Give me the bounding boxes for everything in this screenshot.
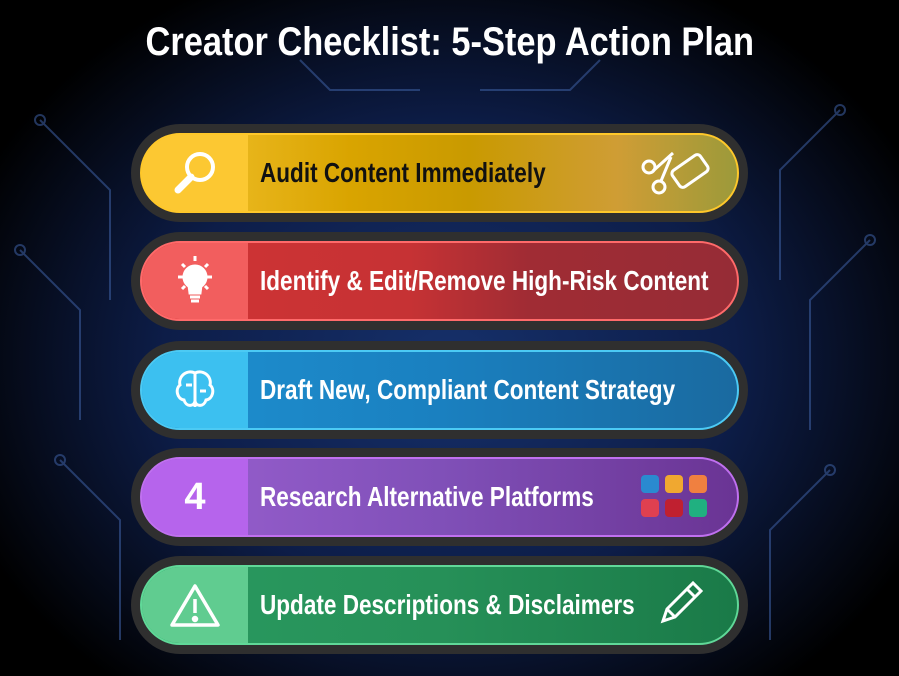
number 4: 4 <box>184 476 206 518</box>
step 4 <box>131 448 748 546</box>
step 5 <box>131 556 748 654</box>
step 3 <box>131 341 748 439</box>
text: Update Descriptions & Disclaimers <box>260 589 635 620</box>
icon: app grid <box>641 475 707 517</box>
icon: scissors eraser <box>642 152 710 194</box>
step 1 <box>131 124 748 222</box>
text: Audit Content Immediately <box>260 157 546 188</box>
icon: brain <box>142 352 248 428</box>
icon: magnifier <box>142 135 248 211</box>
text: Research Alternative Platforms <box>260 481 594 512</box>
number 4 <box>142 459 248 535</box>
icon: warning <box>142 567 248 643</box>
text: Identify & Edit/Remove High-Risk Content <box>260 265 709 296</box>
step 2 <box>131 232 748 330</box>
title: Creator Checklist: 5-Step Action Plan <box>145 20 754 64</box>
text: Draft New, Compliant Content Strategy <box>260 374 675 405</box>
icon: bulb <box>142 243 248 319</box>
icon: pencil <box>660 581 703 624</box>
